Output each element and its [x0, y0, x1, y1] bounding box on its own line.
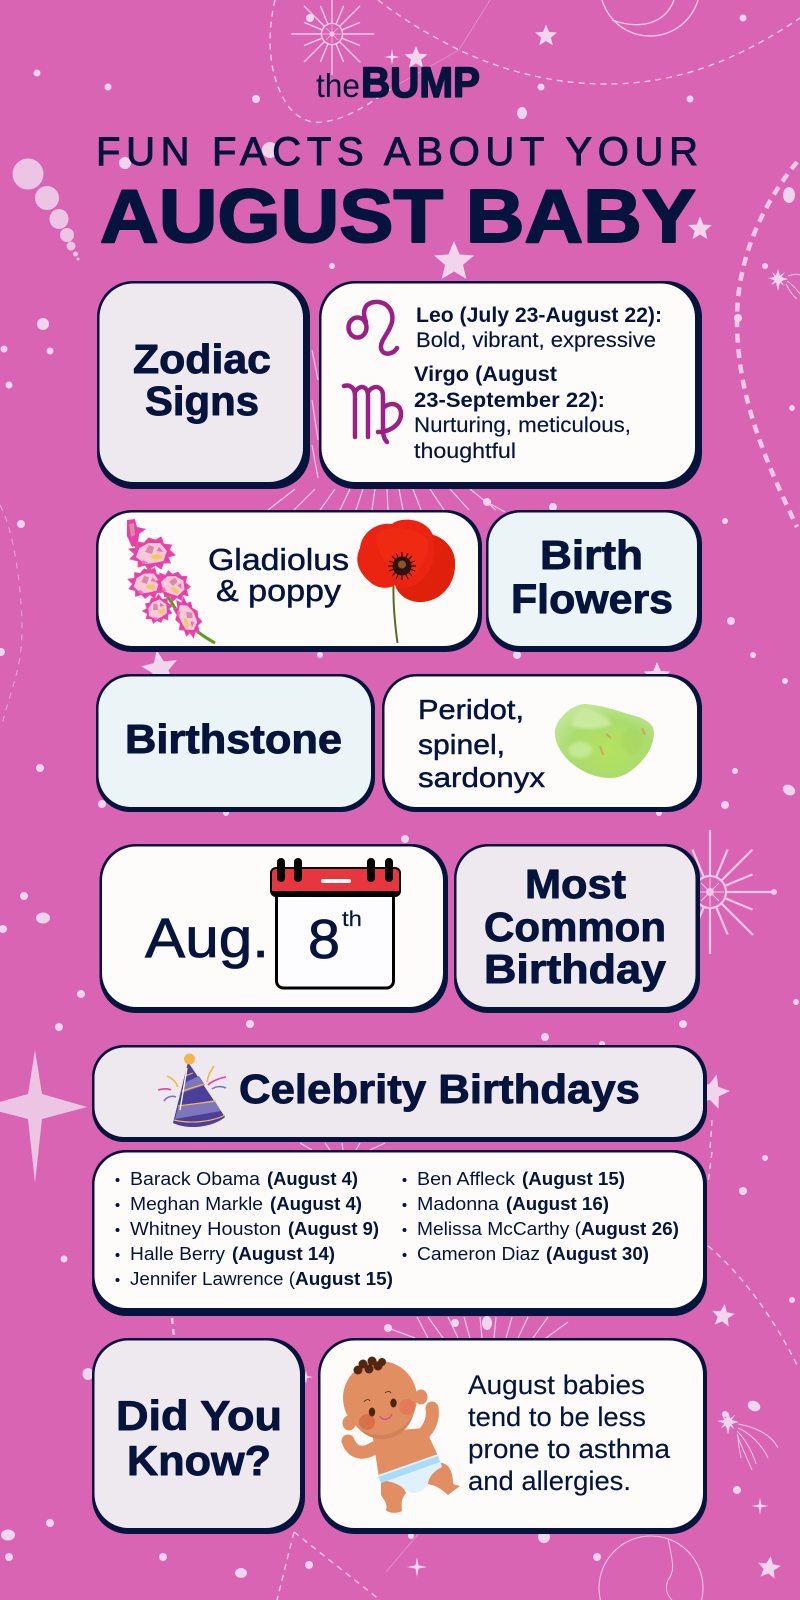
text: Virgo: Virgo (August — [414, 363, 557, 386]
icon: Virgo symbol — [344, 385, 401, 442]
panel: most common birthday heading: Birthday — [484, 946, 666, 992]
panel: zodiac signs detail — [319, 281, 702, 489]
panel: birthstone heading — [96, 674, 375, 812]
text: Virgo: Nurturing, meticulous, — [414, 414, 631, 437]
logo: theBUMP: BUMP — [361, 59, 480, 107]
image: gladiolus flower — [127, 519, 215, 643]
logo: theBUMP — [316, 59, 480, 107]
text: Leo: Bold, vibrant, expressive — [416, 329, 656, 352]
text: right column: (August 30) — [546, 1244, 649, 1264]
text: Virgo — [414, 363, 631, 463]
text: birthstones — [418, 694, 545, 793]
panel: most common birthday heading: Common — [484, 904, 666, 950]
panel: gladiolus and poppy — [96, 510, 482, 652]
title — [96, 130, 698, 258]
text: left column — [130, 1169, 393, 1289]
panel: did you know heading: Know? — [127, 1437, 271, 1484]
icon: calendar — [270, 858, 401, 988]
panel: birthstone heading: Birthstone — [125, 716, 342, 762]
text: fact: August babies — [468, 1370, 645, 1400]
text: 8th — [308, 908, 362, 970]
panel: celebrity birthdays heading — [92, 1045, 707, 1142]
text: right column — [417, 1169, 679, 1264]
text: gladiolus & poppy: & poppy — [216, 573, 342, 608]
text: 8th: th — [342, 908, 362, 931]
text: right column: Cameron Diaz — [417, 1244, 540, 1264]
text: birthstones: Peridot, — [418, 694, 524, 725]
panel: birth flowers heading: Flowers — [511, 576, 673, 622]
text: Virgo: 23-September 22): — [414, 389, 605, 412]
panel: most common birthday heading — [454, 844, 700, 1013]
text: birthstones: sardonyx — [418, 762, 545, 793]
text: fact — [468, 1370, 671, 1496]
text: left column: Jennifer Lawrence ( — [130, 1269, 295, 1289]
text: right column: August 26) — [581, 1219, 679, 1239]
title: AUGUST BABY — [100, 174, 696, 258]
text: left column: (August 4) — [267, 1169, 358, 1189]
text: right column: Melissa McCarthy ( — [417, 1219, 581, 1239]
panel: did you know heading: Did You — [116, 1392, 282, 1439]
illustration: baby — [342, 1356, 460, 1513]
panel: did you know heading — [92, 1338, 305, 1534]
text: Aug.: Aug. — [145, 906, 269, 969]
text: 8th: 8 — [308, 908, 340, 970]
logo: theBUMP: the — [316, 67, 360, 104]
text: left column: Halle Berry — [130, 1244, 225, 1264]
image: poppy flower — [357, 520, 455, 643]
text: left column: Whitney Houston — [130, 1219, 281, 1239]
text: Virgo: thoughtful — [414, 440, 516, 463]
text: left column: Barack Obama — [130, 1169, 261, 1189]
panel: most common birthday heading: Most — [525, 861, 626, 907]
text: Celebrity Birthdays: Celebrity Birthdays — [239, 1066, 640, 1112]
text: fact: tend to be less — [468, 1402, 646, 1432]
image: peridot gem — [555, 704, 654, 778]
panel: did you know fact — [318, 1338, 707, 1534]
text: fact: and allergies. — [468, 1466, 631, 1496]
panel: zodiac signs heading: Zodiac — [133, 336, 271, 382]
text: Leo — [416, 304, 662, 352]
icon: party hat — [158, 1054, 226, 1127]
panel: peridot, spinel, sardonyx — [382, 674, 702, 812]
panel: birth flowers heading: Birth — [540, 532, 643, 578]
text: fact: prone to asthma — [468, 1434, 671, 1464]
panel: August 8th date — [100, 844, 448, 1013]
text: left column: (August 4) — [270, 1194, 362, 1214]
panel: celebrity birthdays list — [92, 1150, 707, 1316]
text: gladiolus & poppy: Gladiolus — [208, 542, 349, 577]
text: left column: Meghan Markle — [130, 1194, 263, 1214]
text: left column: August 15) — [295, 1269, 393, 1289]
text: birthstones: spinel, — [418, 729, 505, 760]
text: left column: (August 9) — [288, 1219, 379, 1239]
text: right column: Madonna — [417, 1194, 500, 1214]
title: FUN FACTS ABOUT YOUR — [96, 130, 698, 174]
text: Leo: Leo (July 23-August 22): — [416, 304, 662, 327]
panel: zodiac signs heading: Signs — [145, 378, 259, 424]
icon: Leo symbol — [348, 302, 397, 354]
text: right column: Ben Affleck — [417, 1169, 516, 1189]
panel: birth flowers heading — [486, 510, 702, 652]
text: gladiolus & poppy — [208, 542, 349, 608]
text: left column: (August 14) — [232, 1244, 335, 1264]
panel: zodiac signs heading — [97, 281, 310, 489]
text: right column: (August 15) — [522, 1169, 625, 1189]
text: right column: (August 16) — [506, 1194, 609, 1214]
